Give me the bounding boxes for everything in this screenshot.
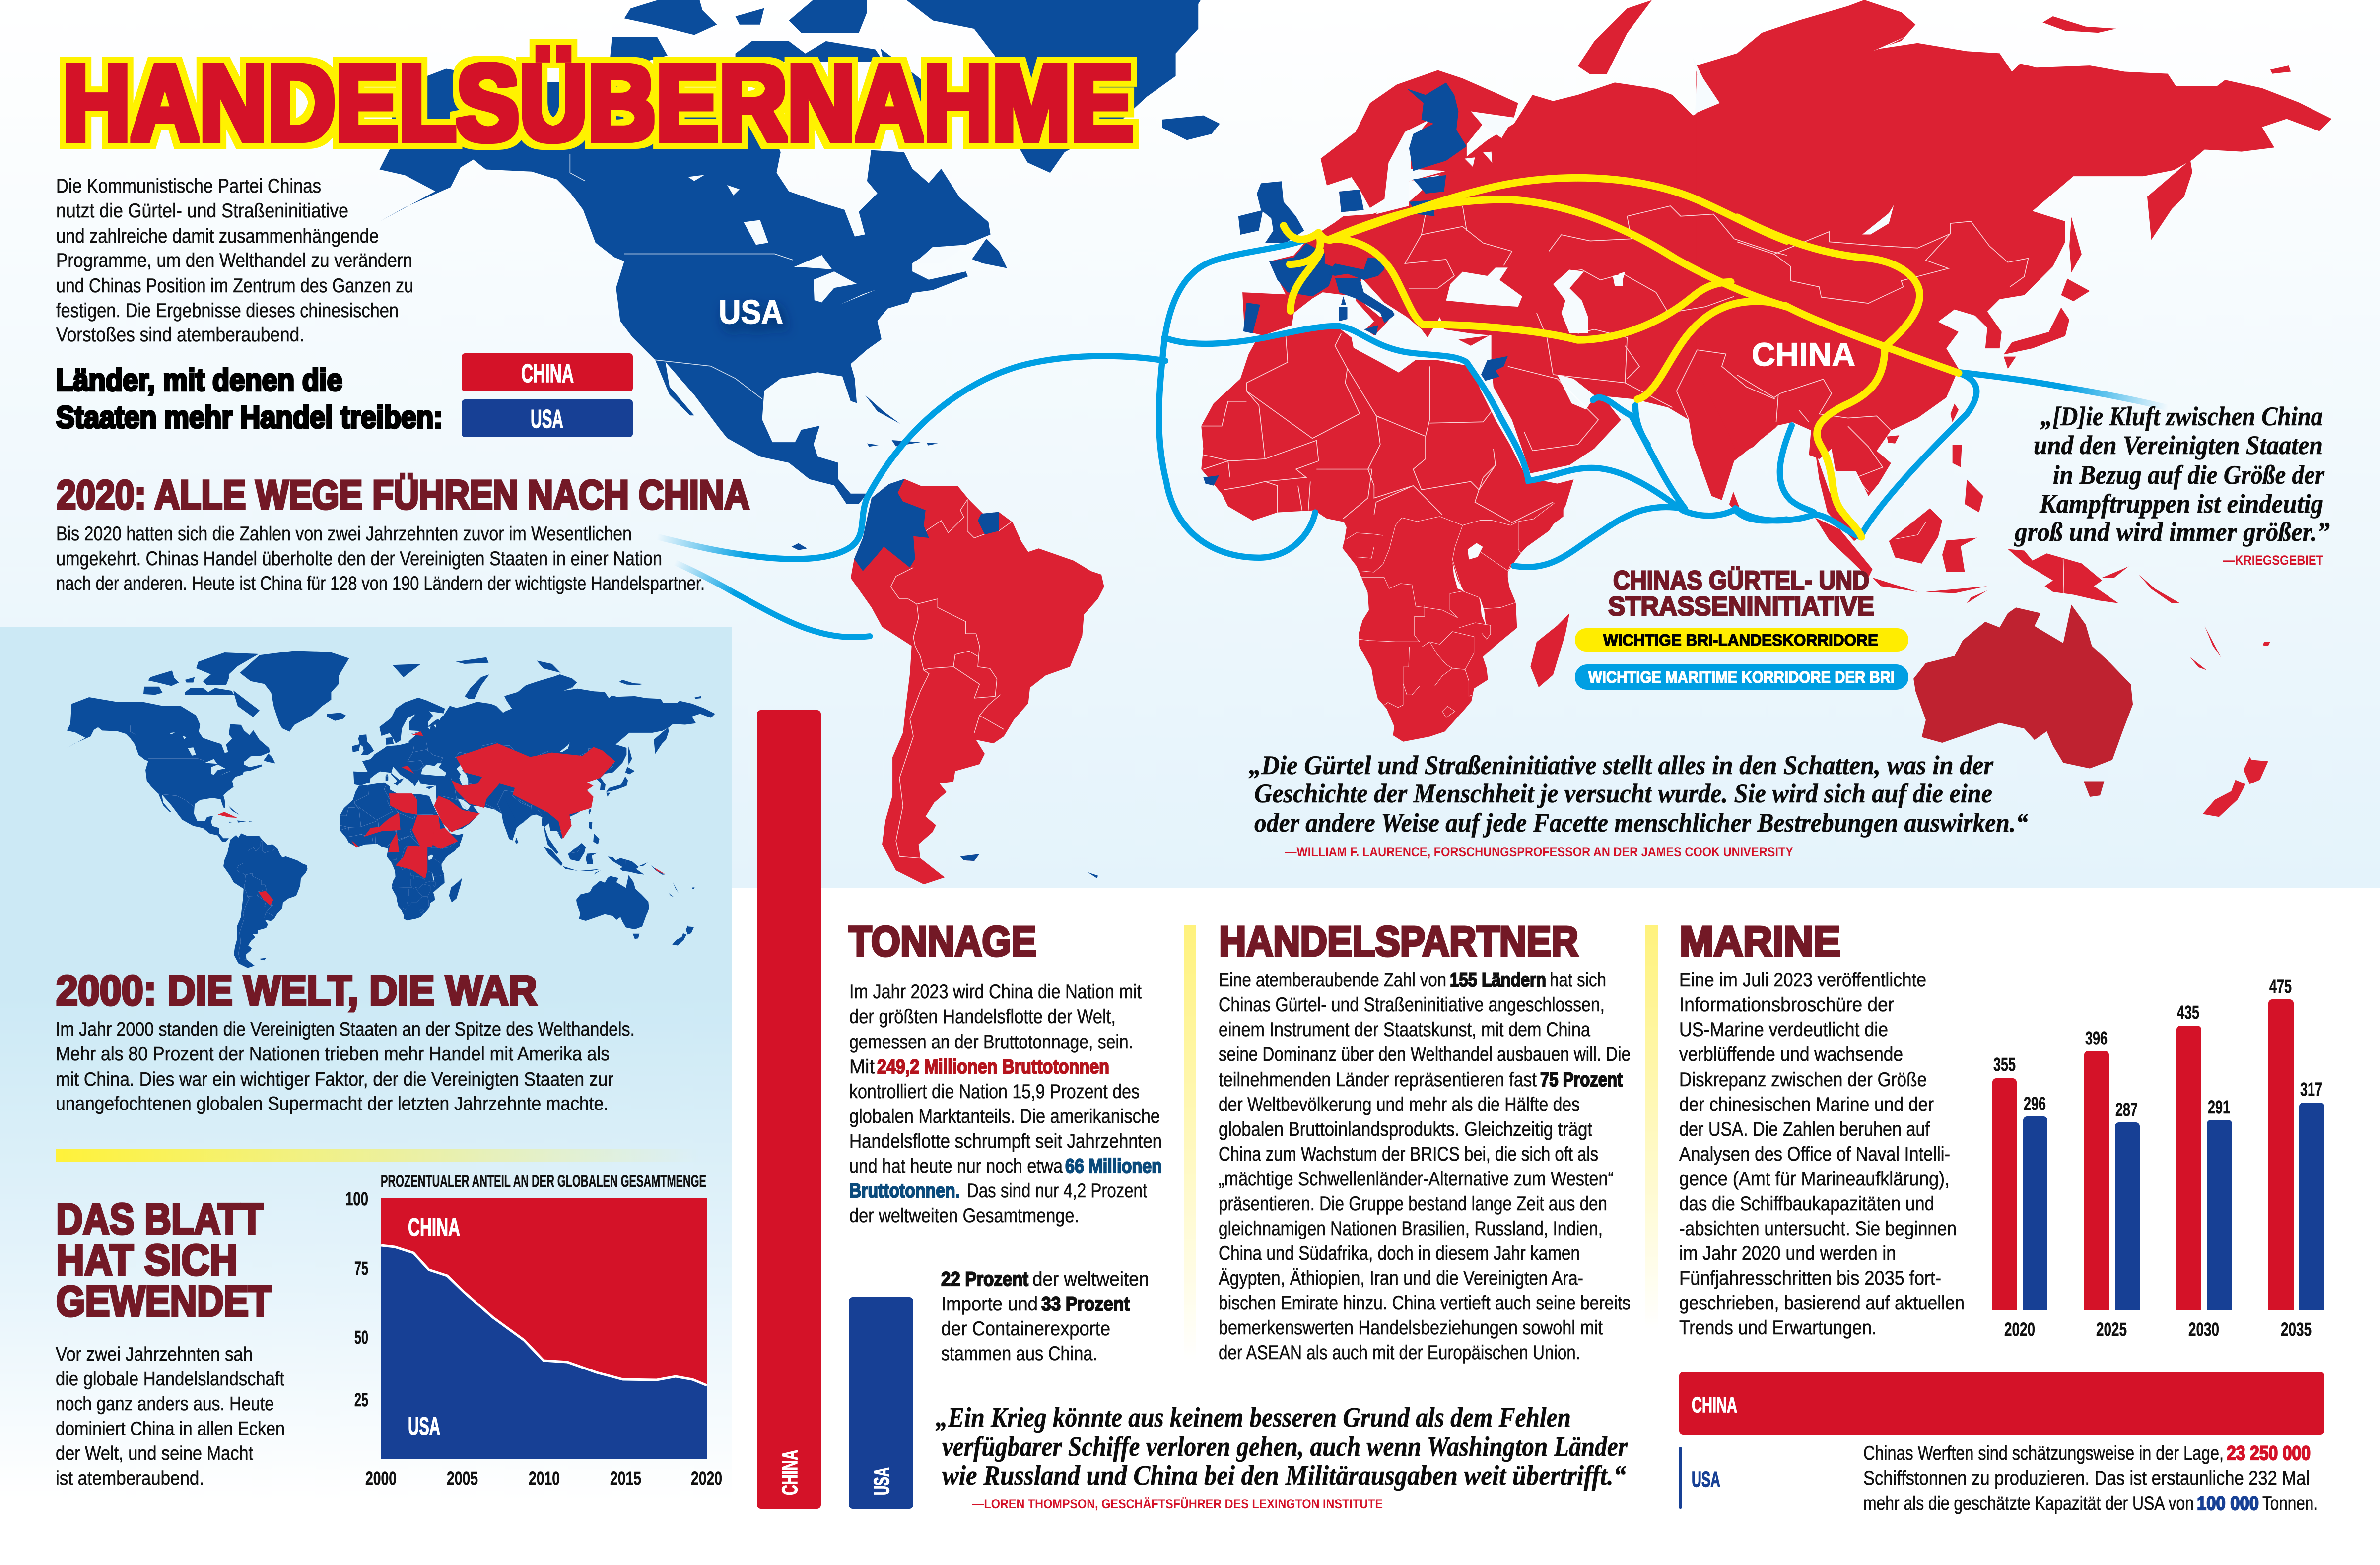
- text: Tonnage: 66 Millionen: [1065, 1155, 1162, 1177]
- text: Handelspartner: Chinas Gürtel- und Straßeninitiative angeschlossen,: [1219, 994, 1605, 1016]
- blue countries in South America: [792, 479, 1098, 878]
- text: Marine: verblüffende und wachsende: [1679, 1043, 1903, 1065]
- text: Handelspartner: der ASEAN als auch mit der Europäischen Union.: [1219, 1342, 1580, 1364]
- bar chart: fleet size: 2035: [2281, 1319, 2312, 1340]
- text: Das Blatt: ist atemberaubend.: [56, 1468, 204, 1489]
- bar chart: fleet size: 287: [2115, 1100, 2138, 1120]
- intro text: nutzt die Gürtel- und Straßeninitiative: [56, 200, 348, 222]
- text: Tonnage: Im Jahr 2023 wird China die Nation mit: [849, 981, 1142, 1003]
- quote: Thompson: wie Russland und China bei den Militärausgaben weit übertrifft.“: [942, 1460, 1626, 1491]
- maritime corridors (blue routes): [657, 238, 2168, 637]
- text: Handelspartner: der Weltbevölkerung und mehr als die Hälfte des: [1219, 1094, 1580, 1115]
- quote: Kriegsgebiet: in Bezug auf die Größe der: [2053, 460, 2325, 490]
- text: Das Blatt: [56, 1344, 285, 1489]
- area chart: share of global total: 2020: [691, 1468, 722, 1489]
- text: Marine: [1679, 969, 1965, 1339]
- area chart: share of global total: USA: [408, 1412, 440, 1440]
- text: Marine: der USA. Die Zahlen beruhen auf: [1679, 1118, 1930, 1140]
- Svalbard and Arctic islands: [393, 657, 561, 677]
- intro text: und Chinas Position im Zentrum des Ganzen zu: [56, 275, 413, 297]
- bar chart: fleet size: 2020: [2004, 1319, 2035, 1340]
- intro text: festigen. Die Ergebnisse dieses chinesischen: [56, 300, 399, 322]
- bar: China shipbuilding capacity: CHINA: [1692, 1393, 1737, 1417]
- bar chart: fleet size: 396: [2085, 1028, 2108, 1049]
- text: Handelspartner: 75 Prozent: [1540, 1069, 1623, 1091]
- text: Marine: im Jahr 2020 und werden in: [1679, 1242, 1896, 1264]
- text: Marine: Diskrepanz zwischen der Größe: [1679, 1069, 1927, 1091]
- text: Tonnage: der größten Handelsflotte der Welt,: [849, 1006, 1116, 1028]
- intro text: [56, 175, 413, 346]
- text: Marine: -absichten untersucht. Sie beginnen: [1679, 1218, 1957, 1239]
- bar chart: fleet size: 435: [2177, 1002, 2199, 1023]
- text: imports and container exports: 33 Prozent: [1041, 1293, 1130, 1315]
- text: Tonnage: [849, 981, 1162, 1227]
- text: Das Blatt: der Welt, und seine Macht: [56, 1443, 253, 1464]
- text: Handelspartner: 155 Ländern: [1450, 969, 1546, 991]
- bar chart: fleet size: 291: [2208, 1097, 2230, 1118]
- text: 2020: [56, 523, 705, 594]
- bar chart: fleet size: 296: [2024, 1094, 2046, 1114]
- legend heading: Staaten mehr Handel treiben:: [56, 400, 443, 435]
- text: 2020: nach der anderen. Heute ist China für 128 von 190 Ländern der wichtigste Handelspartner.: [56, 573, 705, 594]
- quote: Thompson: verfügbarer Schiffe verloren gehen, auch wenn Washington Länder: [942, 1432, 1628, 1462]
- text: imports and container exports: 22 Prozent: [941, 1268, 1028, 1290]
- heading: Tonnage: TONNAGE: [849, 918, 1036, 965]
- text: Tonnage: Das sind nur 4,2 Prozent: [967, 1180, 1147, 1202]
- area chart: share of global total: 2010: [529, 1468, 560, 1489]
- legend: USA: USA: [531, 405, 563, 434]
- blue countries in Europe and the Middle East: [1203, 82, 1508, 486]
- heading: Das Blatt hat sich gewendet: HAT SICH: [56, 1237, 238, 1284]
- text: Tonnage: Bruttotonnen.: [849, 1180, 960, 1202]
- heading: Handelspartner: HANDELSPARTNER: [1219, 918, 1578, 965]
- text: Marine: US-Marine verdeutlicht die: [1679, 1019, 1888, 1041]
- bar chart: fleet size: 355: [1993, 1054, 2016, 1075]
- text: Marine: geschrieben, basierend auf aktuellen: [1679, 1292, 1965, 1314]
- quote: Laurence: —WILLIAM F. LAURENCE, FORSCHUNGSPROFESSOR AN DER JAMES COOK UNIVERSITY: [1285, 845, 1793, 859]
- legend pill: land corridors: WICHTIGE BRI-LANDESKORRIDORE: [1603, 631, 1878, 649]
- text: 2000: unangefochtenen globalen Supermacht der letzten Jahrzehnte machte.: [56, 1093, 609, 1114]
- text: imports and container exports: stammen aus China.: [941, 1343, 1097, 1365]
- intro text: Die Kommunistische Partei Chinas: [56, 175, 321, 197]
- area chart: share of global total: [345, 1172, 722, 1489]
- quote: Kriegsgebiet: „[D]ie Kluft zwischen China: [2040, 401, 2323, 431]
- bar chart: fleet size: 317: [2300, 1079, 2322, 1100]
- bar chart: fleet size: [1992, 977, 2324, 1340]
- legend: USA: [462, 399, 633, 437]
- text: shipyards: [1863, 1442, 2318, 1514]
- area chart: share of global total: 100: [345, 1189, 368, 1210]
- quote: Thompson: „Ein Krieg könnte aus keinem besseren Grund als dem Fehlen: [936, 1402, 1571, 1433]
- heading: 2000: 2000: DIE WELT, DIE WAR: [56, 967, 537, 1014]
- text: Handelspartner: Ägypten, Äthiopien, Iran und die Vereinigten Ara-: [1219, 1267, 1583, 1289]
- text: Handelspartner: [1219, 969, 1631, 1364]
- text: Handelspartner: seine Dominanz über den Welthandel ausbauen will. Die: [1219, 1043, 1631, 1065]
- text: 2020: umgekehrt. Chinas Handel überholte den der Vereinigten Staaten in einer Nation: [56, 548, 662, 570]
- text: Marine: das die Schiffbaukapazitäten und: [1679, 1193, 1934, 1215]
- area chart: share of global total: PROZENTUALER ANTEIL AN DER GLOBALEN GESAMTMENGE: [381, 1172, 706, 1191]
- text: imports and container exports: der weltweiten: [1032, 1268, 1149, 1290]
- text: 2000: [56, 1019, 635, 1114]
- text: Handelspartner: „mächtige Schwellenländer-Alternative zum Westen“: [1219, 1168, 1614, 1190]
- text: Handelspartner: teilnehmenden Länder repräsentieren fast: [1219, 1069, 1537, 1091]
- world map 2000: [67, 651, 715, 968]
- quote: Thompson: [936, 1402, 1628, 1511]
- quote: Kriegsgebiet: und den Vereinigten Staaten: [2034, 430, 2323, 460]
- text: Tonnage: Mit: [849, 1056, 875, 1078]
- bar: China tonnage: CHINA: [778, 1450, 802, 1495]
- heading: 2020: 2020: ALLE WEGE FÜHREN NACH CHINA: [57, 472, 749, 518]
- world map 2020: trade partners and BRI: [380, 0, 2332, 884]
- page background: upper map area: [0, 0, 2380, 888]
- text: 2000: Im Jahr 2000 standen die Vereinigten Staaten an der Spitze des Welthandels.: [56, 1019, 635, 1040]
- area chart: share of global total: 25: [354, 1390, 368, 1411]
- intro text: Vorstoßes sind atemberaubend.: [56, 324, 304, 346]
- legend pill: maritime corridors: WICHTIGE MARITIME KORRIDORE DER BRI: [1588, 668, 1895, 686]
- text: imports and container exports: der Containerexporte: [941, 1318, 1110, 1340]
- area chart: share of global total: 2015: [610, 1468, 641, 1489]
- bar: China tonnage: [757, 710, 821, 1509]
- quote: Thompson: —LOREN THOMPSON, GESCHÄFTSFÜHRER DES LEXINGTON INSTITUTE: [972, 1497, 1383, 1511]
- area chart: share of global total: 50: [354, 1327, 368, 1348]
- text: shipyards: 23 250 000: [2227, 1442, 2311, 1464]
- legend pill: maritime corridors: [1575, 664, 1908, 690]
- text: Das Blatt: dominiert China in allen Ecken: [56, 1418, 285, 1439]
- text: Handelspartner: Eine atemberaubende Zahl von: [1219, 969, 1446, 991]
- bar: USA tonnage: [849, 1297, 913, 1509]
- text: shipyards: 100 000: [2197, 1493, 2259, 1514]
- text: Marine: Eine im Juli 2023 veröffentlichte: [1679, 969, 1926, 991]
- text: 2000: mit China. Dies war ein wichtiger Faktor, der die Vereinigten Staaten zur: [56, 1069, 613, 1090]
- title: HANDELSÜBERNAHME: [63, 43, 1134, 163]
- red countries on 2000 map: [218, 731, 666, 906]
- bar chart: fleet size: 475: [2269, 977, 2292, 997]
- heading: Das Blatt hat sich gewendet: [56, 1195, 272, 1325]
- intro text: Programme, um den Welthandel zu verändern: [56, 250, 412, 271]
- text: Handelspartner: globalen Bruttoinlandsprodukts. Gleichzeitig trägt: [1219, 1118, 1592, 1140]
- legend: Chinas Gürtel- und Straßeninitiative: STRASSENINITIATIVE: [1608, 591, 1874, 621]
- quote: Laurence: Geschichte der Menschheit je versucht wurde. Sie wird sich auf die eine: [1254, 779, 1992, 808]
- text: Tonnage: Handelsflotte schrumpft seit Jahrzehnten: [849, 1130, 1162, 1152]
- text: Handelspartner: bemerkenswerten Handelsbeziehungen sowohl mit: [1219, 1317, 1603, 1339]
- area chart: share of global total: 75: [354, 1258, 368, 1279]
- text: imports and container exports: Importe und: [941, 1293, 1038, 1315]
- quote: Kriegsgebiet: groß und wird immer größer.”: [2014, 517, 2330, 547]
- text: shipyards: Tonnen.: [2262, 1493, 2318, 1514]
- text: Handelspartner: präsentieren. Die Gruppe bestand lange Zeit aus den: [1219, 1193, 1607, 1215]
- bar chart: fleet size: 2025: [2096, 1319, 2127, 1340]
- text: Tonnage: kontrolliert die Nation 15,9 Prozent des: [849, 1081, 1140, 1103]
- quote: Laurence: „Die Gürtel und Straßeninitiative stellt alles in den Schatten, was in der: [1249, 750, 1994, 780]
- map label: CHINA: CHINA: [1752, 336, 1855, 373]
- text: Marine: gence (Amt für Marineaufklärung),: [1679, 1168, 1950, 1190]
- text: shipyards: Chinas Werften sind schätzungsweise in der Lage,: [1863, 1442, 2224, 1464]
- text: Tonnage: gemessen an der Bruttotonnage, sein.: [849, 1031, 1133, 1053]
- panel: 2000 and chart: [0, 627, 732, 1500]
- text: Handelspartner: einem Instrument der Staatskunst, mit dem China: [1219, 1019, 1591, 1041]
- text: Marine: Analysen des Office of Naval Intelli-: [1679, 1143, 1950, 1165]
- text: Marine: Trends und Erwartungen.: [1679, 1317, 1877, 1339]
- legend: Chinas Gürtel- und Straßeninitiative: [1575, 566, 1908, 690]
- text: Handelspartner: China und Südafrika, doch in diesem Jahr kamen: [1219, 1242, 1580, 1264]
- quote: Laurence: oder andere Weise auf jede Facette menschlicher Bestrebungen auswirken.“: [1254, 808, 2028, 838]
- area chart: share of global total: 2000: [365, 1468, 397, 1489]
- legend pill: land corridors: [1575, 628, 1908, 652]
- text: Tonnage: und hat heute nur noch etwa: [849, 1155, 1063, 1177]
- intro text: und zahlreiche damit zusammenhängende: [56, 225, 379, 247]
- heading: Marine: MARINE: [1680, 918, 1840, 965]
- legend heading: [56, 363, 443, 435]
- bar: USA shipbuilding capacity: [1679, 1447, 1720, 1509]
- heading: Das Blatt hat sich gewendet: DAS BLATT: [56, 1195, 263, 1243]
- text: Marine: Informationsbroschüre der: [1679, 994, 1894, 1016]
- area chart: share of global total: 2005: [447, 1468, 478, 1489]
- text: imports and container exports: [941, 1268, 1149, 1365]
- text: Handelspartner: gleichnamigen Nationen Brasilien, Russland, Indien,: [1219, 1218, 1603, 1239]
- quote: Kriegsgebiet: —KRIEGSGEBIET: [2223, 553, 2323, 568]
- area chart: share of global total: CHINA: [408, 1213, 460, 1241]
- text: Handelspartner: China zum Wachstum der BRICS bei, die sich oft als: [1219, 1143, 1598, 1165]
- text: Das Blatt: noch ganz anders aus. Heute: [56, 1393, 274, 1415]
- text: 2000: Mehr als 80 Prozent der Nationen trieben mehr Handel mit Amerika als: [56, 1043, 610, 1065]
- heading: Das Blatt hat sich gewendet: GEWENDET: [56, 1278, 272, 1325]
- text: shipyards: mehr als die geschätzte Kapazität der USA von: [1863, 1493, 2194, 1514]
- text: Handelspartner: hat sich: [1550, 969, 1606, 991]
- legend: Chinas Gürtel- und Straßeninitiative: CHINAS GÜRTEL- UND: [1613, 566, 1869, 595]
- text: Das Blatt: die globale Handelslandschaft: [56, 1369, 284, 1390]
- quote: Kriegsgebiet: Kampftruppen ist eindeutig: [2039, 489, 2323, 519]
- text: Handelspartner: bischen Emirate hinzu. China vertieft auch seine bereits: [1219, 1292, 1631, 1314]
- text: Tonnage: 249,2 Millionen Bruttotonnen: [877, 1056, 1109, 1078]
- legend: China: CHINA: [521, 359, 574, 388]
- text: Marine: Fünfjahresschritten bis 2035 fort-: [1679, 1267, 1941, 1289]
- legend: China: [462, 353, 633, 391]
- bar: USA tonnage: USA: [870, 1467, 894, 1495]
- map label: USA: USA: [719, 293, 783, 331]
- text: shipyards: Schiffstonnen zu produzieren. Das ist erstaunliche 232 Mal: [1863, 1467, 2310, 1489]
- text: Marine: der chinesischen Marine und der: [1679, 1094, 1934, 1115]
- text: Tonnage: der weltweiten Gesamtmenge.: [849, 1205, 1079, 1227]
- legend heading: Länder, mit denen die: [56, 363, 342, 397]
- text: 2020: Bis 2020 hatten sich die Zahlen von zwei Jahrzehnten zuvor im Wesentlichen: [56, 523, 632, 545]
- quote: Laurence: [1249, 750, 2028, 859]
- land corridors (yellow routes): [1284, 178, 1959, 537]
- quote: Kriegsgebiet: [2014, 401, 2330, 568]
- text: Tonnage: globalen Marktanteils. Die amerikanische: [849, 1106, 1160, 1127]
- text: Das Blatt: Vor zwei Jahrzehnten sah: [56, 1344, 253, 1365]
- bar chart: fleet size: 2030: [2188, 1319, 2219, 1340]
- bar: USA shipbuilding capacity: USA: [1692, 1467, 1720, 1492]
- bar: China shipbuilding capacity: [1679, 1372, 2324, 1435]
